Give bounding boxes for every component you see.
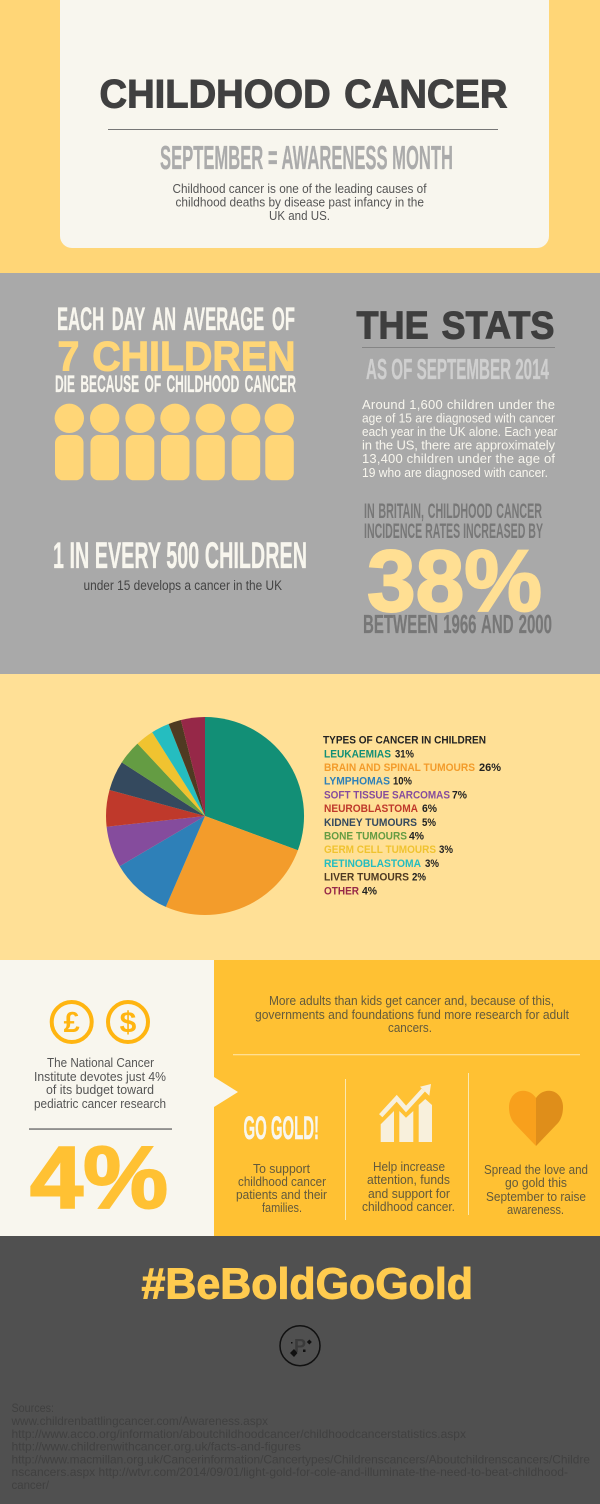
- legend: KIDNEY TUMOURS: [324, 817, 417, 829]
- panel: header: [0, 0, 600, 273]
- column text: help: and support for: [368, 1186, 451, 1201]
- legend: 3%: [425, 858, 439, 870]
- stats text: 13,400 children under the age of: [362, 451, 555, 466]
- research text: [255, 993, 569, 1035]
- funding text: The National Cancer: [47, 1055, 155, 1070]
- legend: 6%: [422, 803, 437, 815]
- research text: governments and foundations fund more research for adult: [255, 1007, 569, 1022]
- legend: LEUKAEMIAS: [324, 748, 391, 760]
- heading: the stats: THE STATS: [356, 305, 554, 348]
- legend: 4%: [362, 885, 377, 897]
- column text: spread: September to raise: [486, 1189, 586, 1204]
- legend: 2%: [412, 872, 426, 884]
- stat: 4%: 4%: [30, 1128, 168, 1227]
- caption: under 15: under 15 develops a cancer in the UK: [84, 578, 282, 593]
- legend: BRAIN AND SPINAL TUMOURS: [324, 762, 475, 774]
- stats text: [362, 397, 558, 480]
- icon: heart: [509, 1091, 563, 1146]
- legend: 10%: [393, 776, 412, 788]
- panel: types of cancer: [0, 674, 600, 960]
- icon: seven children: [55, 404, 294, 480]
- panel: footer: [0, 1236, 600, 1504]
- legend: TYPES OF CANCER IN CHILDREN: [323, 734, 486, 746]
- legend: 7%: [452, 789, 467, 801]
- column text: help: [362, 1159, 455, 1214]
- heading: in britain: [364, 500, 543, 543]
- sources: http://www.childrenwithcancer.org.uk/facts-and-figures: [12, 1440, 301, 1454]
- icon: logo: [280, 1326, 320, 1366]
- icon: logo: P: [294, 1336, 306, 1356]
- column text: support: families.: [262, 1200, 302, 1215]
- icon: dollar coin: $: [120, 1006, 137, 1040]
- intro text: UK and US.: [269, 208, 330, 223]
- legend: 26%: [479, 762, 501, 774]
- column text: help: attention, funds: [367, 1172, 450, 1187]
- column text: spread: awareness.: [507, 1202, 564, 1217]
- pie chart: [106, 717, 304, 915]
- legend: RETINOBLASTOMA: [324, 858, 421, 870]
- research text: More adults than kids get cancer and, because of this,: [269, 993, 554, 1008]
- research text: cancers.: [388, 1020, 432, 1035]
- column text: support: To support: [253, 1161, 310, 1176]
- legend: 3%: [439, 844, 453, 856]
- sources: www.childrenbattlingcancer.com/Awareness.aspx: [11, 1414, 268, 1428]
- panel: go gold: GO GOLD!: [244, 1110, 319, 1146]
- column text: spread: go gold this: [505, 1175, 567, 1190]
- legend: NEUROBLASTOMA: [324, 803, 418, 815]
- column text: help: Help increase: [373, 1159, 445, 1174]
- intro text: Childhood cancer is one of the leading causes of: [172, 181, 427, 196]
- stats text: Around 1,600 children under the: [362, 397, 555, 412]
- panel: go gold: [214, 960, 600, 1236]
- sources: Sources:: [12, 1401, 54, 1415]
- legend: BONE TUMOURS: [324, 830, 407, 842]
- legend: 5%: [422, 817, 436, 829]
- funding text: [34, 1055, 166, 1111]
- column text: spread: Spread the love and: [484, 1162, 588, 1177]
- funding text: Institute devotes just 4%: [34, 1069, 166, 1084]
- sources: http://www.macmillan.org.uk/Cancerinformation/Cancertypes/Childrenscancers/Aboutchildrenscancers/Childre: [12, 1452, 590, 1466]
- intro text: childhood deaths by disease past infancy in the: [176, 194, 424, 210]
- sources: [11, 1401, 590, 1492]
- icon: pound coin: [52, 1002, 92, 1042]
- icon: dollar coin: [108, 1002, 148, 1042]
- legend: LIVER TUMOURS: [324, 872, 409, 884]
- sources: nscancers.aspx http://wtvr.com/2014/09/01/light-gold-for-cole-and-illuminate-the-need-to-beat-childhood-: [12, 1465, 568, 1479]
- sources: http://www.acco.org/information/aboutchildhoodcancer/childhoodcancerstatistics.aspx: [12, 1427, 466, 1441]
- stat: 1 in every 500: 1 IN EVERY 500 CHILDREN: [53, 535, 307, 576]
- legend: [323, 734, 501, 897]
- sources: cancer/: [12, 1478, 50, 1492]
- stats text: in the US, there are approximately: [362, 438, 556, 452]
- heading: each day: EACH DAY AN AVERAGE OF: [57, 301, 295, 337]
- funding text: pediatric cancer research: [34, 1096, 166, 1111]
- column text: support: [236, 1161, 328, 1215]
- legend: 4%: [409, 830, 424, 842]
- intro text: [172, 181, 427, 223]
- arrow: [214, 1077, 238, 1107]
- stats text: age of 15 are diagnosed with cancer: [362, 410, 556, 426]
- heading: 7 children: 7 CHILDREN: [58, 333, 296, 380]
- column text: support: childhood cancer: [238, 1174, 327, 1189]
- column text: spread: [484, 1162, 588, 1217]
- column text: help: childhood cancer.: [362, 1199, 455, 1214]
- stat: 38%: 38%: [367, 533, 542, 630]
- funding text: of its budget toward: [46, 1082, 154, 1097]
- stats text: each year in the UK alone. Each year: [362, 424, 558, 439]
- legend: SOFT TISSUE SARCOMAS: [324, 789, 450, 801]
- title: CHILDHOOD CANCER: [100, 73, 508, 117]
- hashtag: #BeBoldGoGold: [142, 1261, 473, 1309]
- icon: pound coin: £: [64, 1007, 80, 1039]
- legend: 31%: [395, 748, 414, 760]
- stats text: 19 who are diagnosed with cancer.: [362, 465, 548, 480]
- legend: GERM CELL TUMOURS: [324, 844, 436, 856]
- panel: funding: [0, 960, 214, 1236]
- column text: support: patients and their: [236, 1187, 328, 1202]
- panel: stats: [0, 273, 600, 674]
- header card: [60, 0, 549, 248]
- legend: OTHER: [324, 885, 359, 897]
- heading: die because: DIE BECAUSE OF CHILDHOOD CANCER: [55, 371, 296, 398]
- icon: growth chart: [381, 1084, 432, 1142]
- legend: LYMPHOMAS: [324, 776, 390, 788]
